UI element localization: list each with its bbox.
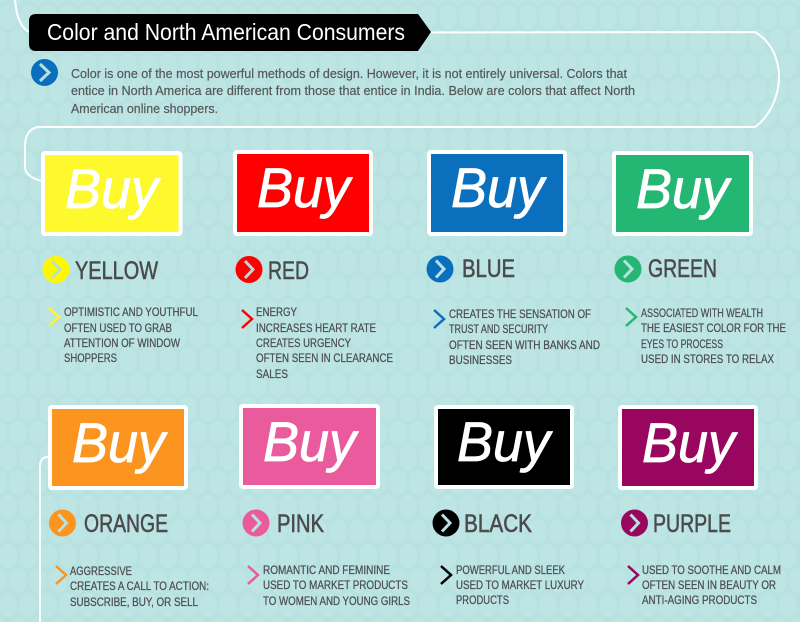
orange heading: ORANGE <box>84 510 168 538</box>
purple heading: PURPLE <box>653 510 731 538</box>
black buy button <box>436 407 572 487</box>
yellow description: OFTEN USED TO GRAB <box>64 321 172 335</box>
purple chevron <box>628 566 638 584</box>
yellow buy button: Buy <box>65 157 161 220</box>
red description: SALES <box>256 367 288 381</box>
panel: blue <box>426 152 600 367</box>
intro text: Color is one of the most powerful methods of design. However, it is not entirely universal. Colors that <box>71 66 627 81</box>
black description <box>456 563 584 607</box>
yellow heading: YELLOW <box>75 257 158 285</box>
title banner: Color and North American Consumers <box>47 19 405 45</box>
pink description: USED TO MARKET PRODUCTS <box>263 578 408 592</box>
orange description: SUBSCRIBE, BUY, OR SELL <box>70 595 198 609</box>
panel: black <box>432 407 584 607</box>
blue description: TRUST AND SECURITY <box>449 322 548 336</box>
orange buy button: Buy <box>72 411 168 474</box>
orange description: CREATES A CALL TO ACTION: <box>70 579 209 593</box>
intro text: American online shoppers. <box>71 101 218 116</box>
panel: red <box>235 152 393 381</box>
panel: purple <box>620 407 781 607</box>
green heading: GREEN <box>648 255 717 283</box>
yellow buy button <box>43 153 180 234</box>
pink description: ROMANTIC AND FEMININE <box>263 563 390 577</box>
green description <box>641 306 786 366</box>
pink heading: PINK <box>277 510 324 538</box>
black description: PRODUCTS <box>456 593 509 607</box>
blue buy button: Buy <box>451 156 547 219</box>
green icon <box>614 256 642 282</box>
blue description: BUSINESSES <box>449 353 512 367</box>
black chevron <box>441 566 451 584</box>
blue description <box>449 307 600 367</box>
panel: pink <box>241 406 410 608</box>
pink icon <box>242 510 270 536</box>
red description: OFTEN SEEN IN CLEARANCE <box>256 351 393 365</box>
black heading: BLACK <box>464 510 532 538</box>
blue icon <box>426 256 454 282</box>
green chevron <box>626 308 636 326</box>
black icon <box>432 510 460 536</box>
red icon <box>236 256 262 283</box>
red description: ENERGY <box>256 305 297 319</box>
blue buy button <box>429 152 565 234</box>
panel: orange <box>49 407 209 609</box>
blue heading: BLUE <box>462 255 515 283</box>
purple description: ANTI-AGING PRODUCTS <box>642 593 757 607</box>
yellow chevron <box>49 308 59 326</box>
blue description: CREATES THE SENSATION OF <box>449 307 591 321</box>
green buy button <box>614 153 751 234</box>
pink description: TO WOMEN AND YOUNG GIRLS <box>263 594 410 608</box>
intro text: entice in North America are different from those that entice in India. Below are colors that affect North <box>71 83 635 98</box>
yellow description <box>64 305 198 365</box>
orange description <box>70 564 209 609</box>
red buy button: Buy <box>257 156 353 219</box>
red description <box>256 305 393 381</box>
purple description <box>642 563 781 607</box>
intro icon <box>31 59 58 86</box>
red buy button <box>235 152 371 234</box>
red description: INCREASES HEART RATE <box>256 321 376 335</box>
purple icon <box>621 510 648 536</box>
green description: ASSOCIATED WITH WEALTH <box>641 306 763 320</box>
title banner <box>29 14 431 51</box>
blue chevron <box>434 310 444 328</box>
green description: USED IN STORES TO RELAX <box>641 352 774 366</box>
panel: yellow <box>42 153 198 365</box>
red heading: RED <box>268 257 309 285</box>
pink description <box>263 563 410 608</box>
red chevron <box>242 310 252 328</box>
yellow description: ATTENTION OF WINDOW <box>64 336 181 350</box>
orange buy button <box>50 407 186 488</box>
yellow description: SHOPPERS <box>64 351 117 365</box>
pink buy button: Buy <box>263 410 359 473</box>
purple buy button <box>620 407 756 488</box>
black description: USED TO MARKET LUXURY <box>456 578 584 592</box>
black buy button: Buy <box>457 410 553 473</box>
pink buy button <box>241 406 378 487</box>
pink chevron <box>248 566 258 584</box>
red description: CREATES URGENCY <box>256 336 351 350</box>
green buy button: Buy <box>636 157 732 220</box>
intro text <box>71 66 635 116</box>
yellow description: OPTIMISTIC AND YOUTHFUL <box>64 305 198 319</box>
orange icon <box>49 510 76 536</box>
orange description: AGGRESSIVE <box>70 564 132 578</box>
purple buy button: Buy <box>642 411 738 474</box>
blue description: OFTEN SEEN WITH BANKS AND <box>449 338 600 352</box>
black description: POWERFUL AND SLEEK <box>456 563 565 577</box>
panel: green <box>614 153 786 366</box>
orange chevron <box>56 566 66 584</box>
yellow icon <box>42 256 70 283</box>
green description: EYES TO PROCESS <box>641 337 723 351</box>
